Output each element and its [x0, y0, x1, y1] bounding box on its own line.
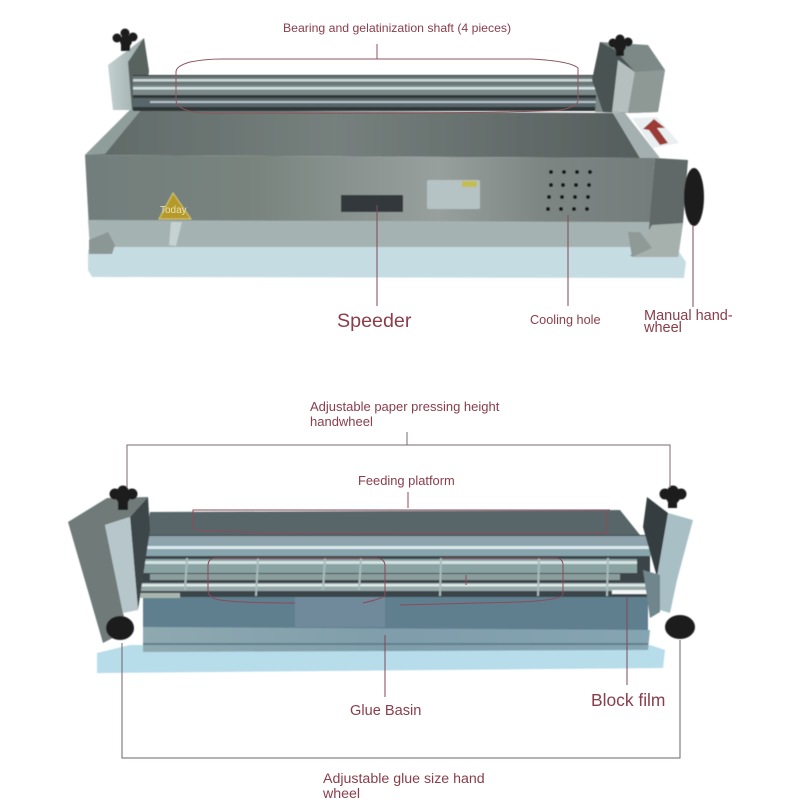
heading: bearing shaft: Bearing and gelatinization shaft (4 pieces) [283, 21, 511, 35]
right knob [608, 34, 632, 56]
feeding platform [145, 510, 640, 537]
knob: upper left [110, 486, 138, 510]
label: adjustable glue size: Adjustable glue size hand [323, 771, 485, 787]
leader: block film [626, 597, 628, 685]
shaft clamps [185, 558, 608, 596]
glue basin [143, 627, 650, 652]
label: speeder: Speeder [337, 310, 412, 332]
lower tray [143, 590, 648, 630]
leader: glue size bracket [122, 640, 680, 758]
knob: upper right [660, 486, 686, 508]
label: glue basin: Glue Basin [350, 703, 421, 719]
label: adjustable paper height: Adjustable paper pressing height [310, 399, 500, 414]
base plate [97, 645, 665, 673]
label: cooling hole: Cooling hole [530, 313, 601, 327]
warning triangle [159, 193, 191, 219]
bottom machine photo [68, 486, 695, 673]
leader: cooling hole [567, 215, 569, 306]
bracket: shaft clamps left [208, 558, 385, 603]
warning label text: Today [160, 205, 187, 216]
drain pipe [169, 222, 182, 246]
bracket: feeding platform [193, 492, 610, 533]
left knob [112, 28, 138, 51]
label sticker [427, 180, 480, 209]
hand wheel [684, 168, 704, 226]
shafts [138, 535, 658, 597]
knob: lower right [665, 615, 695, 639]
top machine photo [85, 28, 704, 278]
left corner bracket [89, 232, 115, 254]
label: block film: Block film [591, 690, 665, 710]
label: manual hand-wheel: wheel [643, 320, 682, 336]
shafts [133, 75, 610, 111]
body right side [630, 158, 688, 257]
block film strips [612, 590, 660, 594]
label: adjustable paper height: handwheel [310, 414, 373, 429]
right corner bracket [628, 232, 652, 257]
label: feeding platform: Feeding platform [358, 473, 455, 488]
base plate [88, 246, 686, 278]
left tower [68, 497, 148, 643]
knob: lower left [106, 616, 134, 640]
speeder panel [341, 195, 403, 212]
label: manual hand-wheel: Manual hand- [644, 308, 733, 324]
leader: glue basin [384, 635, 386, 697]
left tower [108, 38, 149, 110]
body front [85, 155, 655, 247]
leader: speeder [376, 205, 378, 306]
leader: hand wheel [692, 226, 694, 307]
cooling holes [546, 170, 592, 211]
right tower [595, 42, 665, 113]
bracket: bearing shaft [176, 44, 578, 113]
arrow plate [632, 117, 679, 148]
leader: paper height bracket [127, 432, 670, 488]
right tower [657, 513, 693, 613]
body interior [85, 110, 640, 158]
bracket: shaft clamps right [400, 558, 563, 605]
